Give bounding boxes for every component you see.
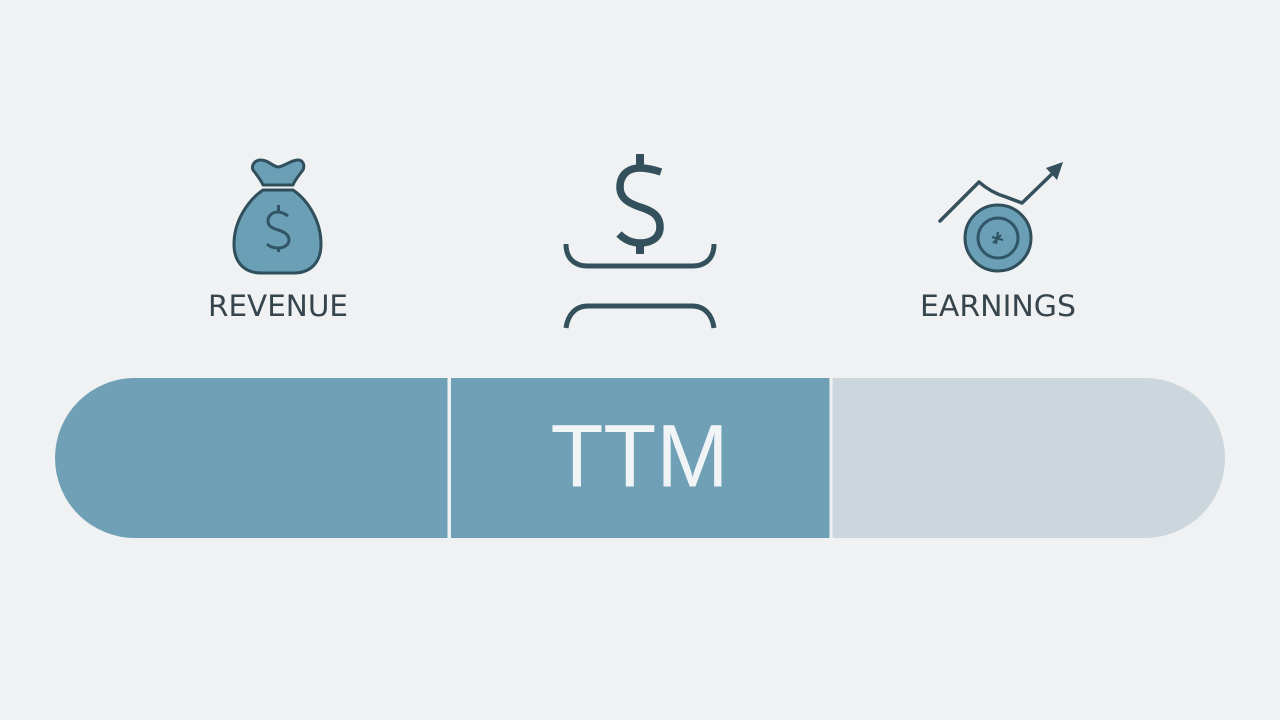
upper bracket bbox=[566, 244, 714, 266]
dollar sign bar bbox=[636, 154, 644, 254]
coin centre mark bbox=[992, 232, 1003, 244]
trend line bbox=[940, 172, 1054, 221]
coin bbox=[965, 205, 1031, 271]
bar segment: left bbox=[55, 378, 448, 538]
icon: dollar sign on bag bbox=[267, 205, 289, 252]
bar segment: right bbox=[832, 378, 1225, 538]
icon: earnings coin with trend arrow bbox=[940, 162, 1063, 271]
dollar sign bbox=[619, 168, 661, 243]
TTM label: TTM bbox=[550, 406, 728, 506]
progress bar bbox=[55, 378, 1225, 538]
icon: dollar over brackets bbox=[566, 154, 714, 328]
label: earnings: EARNINGS bbox=[920, 289, 1076, 323]
arrow head bbox=[1046, 162, 1063, 180]
icon: money bag bbox=[234, 160, 321, 273]
lower bracket bbox=[566, 306, 714, 328]
label: revenue: REVENUE bbox=[208, 289, 348, 323]
bar segment: TTM bbox=[451, 378, 830, 538]
